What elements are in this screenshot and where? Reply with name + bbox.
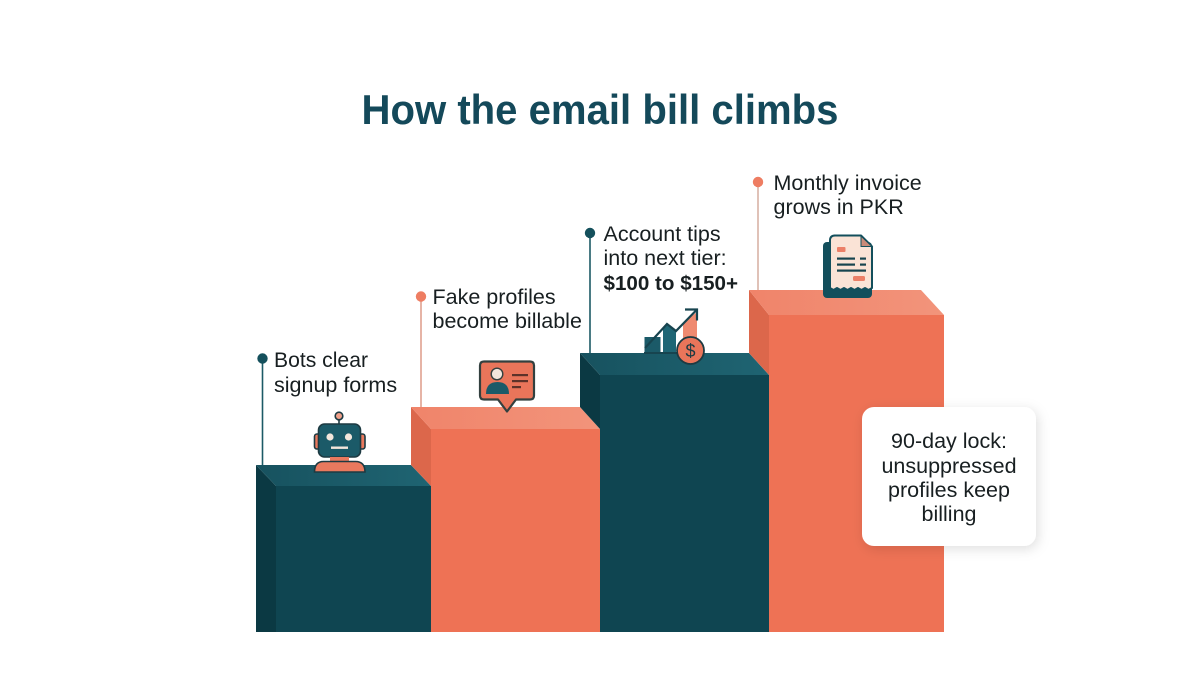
step 3 label: Account tips (604, 222, 721, 246)
step 1 label: Bots clear (274, 348, 368, 372)
step 2 label (416, 285, 582, 407)
step 1 label (257, 348, 397, 465)
step 3 label: into next tier: (604, 246, 727, 270)
step 1 column (256, 465, 431, 632)
step 3 label (585, 222, 738, 353)
callout: 90-day lock: unsuppressed (881, 454, 1017, 478)
icon: fake profile card (480, 362, 534, 412)
step 2 label: become billable (432, 309, 582, 333)
title: How the email bill climbs (362, 86, 838, 133)
step 3 label: $100 to $150+ (604, 272, 738, 295)
callout: 90-day lock (862, 407, 1036, 546)
step 4 label: Monthly invoice (774, 171, 922, 195)
step 4 label: grows in PKR (774, 195, 904, 219)
step 3 column (580, 353, 769, 632)
icon: rising chart with dollar coin: $ (685, 341, 696, 361)
icon: invoice (823, 236, 872, 298)
step 2 column (411, 407, 600, 632)
step 2 label: Fake profiles (432, 285, 556, 309)
icon: robot (314, 412, 365, 472)
icon: rising chart with dollar coin (644, 310, 704, 364)
callout: 90-day lock: billing (922, 502, 976, 526)
step 4 column (749, 290, 944, 632)
step 4 label (753, 171, 922, 290)
callout: 90-day lock: 90-day lock: (891, 429, 1007, 453)
step 1 label: signup forms (274, 373, 397, 397)
callout: 90-day lock: profiles keep (888, 478, 1010, 502)
